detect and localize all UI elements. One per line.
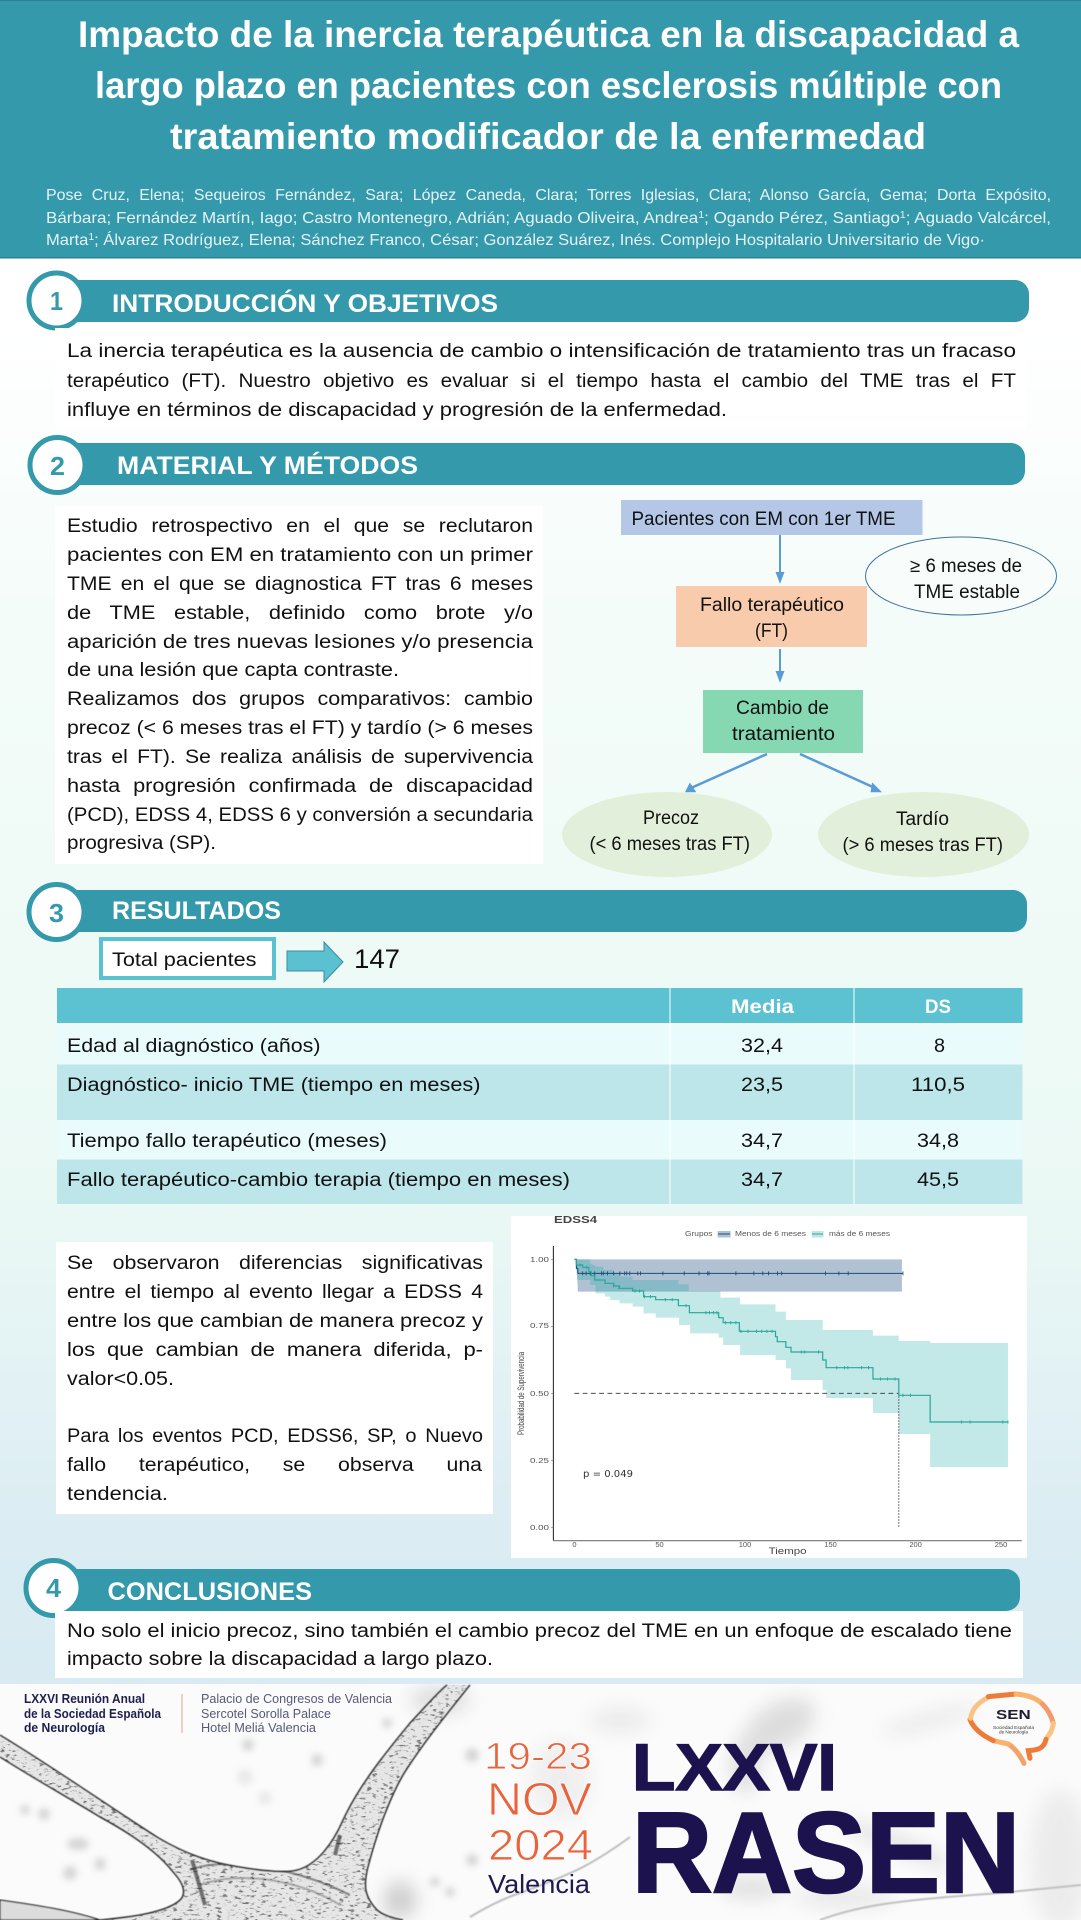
panel: results text: Para los eventos PCD, EDSS6, SP, o Nuevo <box>67 1426 483 1447</box>
authors <box>46 187 1051 249</box>
chart legend <box>685 1229 890 1238</box>
authors: 1 <box>698 210 705 221</box>
arrow: patients to failure <box>777 535 783 581</box>
panel: methods text: aparición de tres nuevas lesiones y/o presencia <box>67 632 533 653</box>
panel: results text: Se observaron diferencias significativas <box>67 1253 483 1274</box>
section 4 heading <box>26 1560 1020 1616</box>
total patients callout <box>101 939 400 982</box>
panel: results text <box>56 1242 493 1514</box>
chart legend: Grupos <box>685 1229 713 1238</box>
chart x axis labels: 100 <box>739 1540 751 1549</box>
section 3 heading <box>29 884 1027 940</box>
chart x axis labels: 0 <box>572 1540 576 1549</box>
chart legend: Menos de 6 meses <box>735 1229 806 1238</box>
panel: methods text: TME en el que se diagnostica FT tras 6 meses <box>67 574 533 595</box>
panel: methods text: precoz (< 6 meses tras el FT) y tardío (> 6 meses <box>67 718 533 739</box>
footer background and neuron image <box>0 1684 1081 1920</box>
footer: LXXVI RASEN wordmark <box>632 1730 1020 1917</box>
table rows: Fallo terapéutico-cambio terapia (tiempo en meses) <box>67 1170 570 1191</box>
chart x axis labels: 150 <box>824 1540 837 1549</box>
chart legend: más de 6 meses <box>829 1229 890 1238</box>
table rows: 110,5 <box>911 1075 965 1096</box>
authors: Marta <box>46 232 87 249</box>
panel: conclusions text <box>55 1611 1023 1678</box>
table header: Media <box>731 997 794 1018</box>
panel: results text: los que cambian de manera diferida, p- <box>67 1340 483 1361</box>
authors: Pose Cruz, Elena; Sequeiros Fernández, Sara; López Caneda, Clara; Torres Iglesias, Clara; Alonso García, Gema; Dorta Expósito, <box>46 187 1051 204</box>
panel: methods text: progresiva (SP). <box>67 833 216 854</box>
total patients callout: Total pacientes <box>112 950 256 971</box>
ellipse: stable TME: ≥ 6 meses de <box>910 556 1022 577</box>
footer: dates: 19-23 <box>484 1736 592 1778</box>
footer: dates: Valencia <box>488 1869 591 1899</box>
header banner <box>0 0 1081 258</box>
footer: SEN logo: Sociedad Española <box>993 1725 1035 1730</box>
title: tratamiento modificador de la enfermedad <box>170 116 926 157</box>
panel: results text: fallo terapéutico, se observa una <box>67 1455 482 1476</box>
chart y axis labels <box>516 1255 549 1532</box>
panel: methods text: de TME estable, definido como brote y/o <box>67 603 533 624</box>
table header: DS <box>925 997 951 1018</box>
panel: results text: valor<0.05. <box>67 1369 174 1390</box>
chart: survival curve EDSS4 <box>511 1215 1027 1558</box>
panel: methods text: de una lesión que capta contraste. <box>67 660 399 681</box>
box: treatment change <box>703 690 863 753</box>
panel: methods text: (PCD), EDSS 4, EDSS 6 y conversión a secundaria <box>67 805 533 826</box>
title: Impacto de la inercia terapéutica en la discapacidad a <box>78 14 1019 55</box>
authors: ; Ogando Pérez, Santiago <box>704 210 900 227</box>
ellipse: early: (< 6 meses tras FT) <box>590 834 750 855</box>
table rows: Edad al diagnóstico (años) <box>67 1036 320 1057</box>
title: largo plazo en pacientes con esclerosis múltiple con <box>95 65 1002 106</box>
ellipse: early: Precoz <box>643 808 699 829</box>
chart y axis labels: Probabilidad de Supervivencia <box>516 1352 526 1435</box>
panel: methods text: Realizamos dos grupos comparativos: cambio <box>67 689 533 710</box>
table rows: 23,5 <box>741 1075 783 1096</box>
section 1 heading <box>29 273 1029 328</box>
authors: Bárbara; Fernández Martín, Iago; Castro Montenegro, Adrián; Aguado Oliveira, Andrea <box>46 210 660 227</box>
p value: p = 0.049 <box>583 1469 633 1480</box>
panel: methods text: tras el FT). Se realiza análisis de supervivencia <box>67 747 533 768</box>
chart plot area <box>551 1246 1022 1541</box>
section 2 heading: 2 <box>50 451 65 481</box>
table rows: 34,7 <box>741 1170 783 1191</box>
authors: ; Álvarez Rodríguez, Elena; Sánchez Franco, César; González Suárez, Inés. Complejo Hospitalario Universitario de Vigo· <box>94 230 985 249</box>
table rows: 45,5 <box>917 1170 959 1191</box>
table rows: 8 <box>934 1036 945 1057</box>
box: treatment change: Cambio de <box>736 698 829 719</box>
table rows: Diagnóstico- inicio TME (tiempo en meses) <box>67 1075 481 1096</box>
section 1 heading: 1 <box>50 286 63 316</box>
chart y axis labels: 0.00 <box>530 1523 549 1532</box>
arrow: failure to change <box>777 649 783 680</box>
footer: SEN logo <box>970 1694 1053 1763</box>
total value: 147 <box>354 944 400 974</box>
panel: methods text: pacientes con EM en tratamiento con un primer <box>67 545 534 566</box>
panel: conclusions text: No solo el inicio precoz, sino también el cambio precoz del TME en un enfoque de escalado tiene <box>67 1621 1012 1642</box>
table rows: Tiempo fallo terapéutico (meses) <box>67 1131 387 1152</box>
footer: meeting name: de Neurología <box>24 1721 106 1735</box>
box: patients <box>621 500 922 535</box>
chart y axis labels: 0.75 <box>530 1321 549 1330</box>
chart title: EDSS4 <box>554 1215 598 1226</box>
authors: 1 <box>88 232 95 243</box>
footer: venues: Hotel Meliá Valencia <box>201 1721 316 1735</box>
ellipse: late <box>818 792 1029 877</box>
footer: SEN logo: SEN <box>996 1707 1031 1722</box>
panel: methods text: hasta progresión confirmada de discapacidad <box>67 776 533 797</box>
box: patients: Pacientes con EM con 1er TME <box>632 509 896 530</box>
box: treatment change: tratamiento <box>732 724 835 745</box>
ellipse: early <box>562 792 772 877</box>
chart x axis labels: Tiempo <box>769 1546 807 1556</box>
table rows: 32,4 <box>741 1036 783 1057</box>
footer: meeting name: de la Sociedad Española <box>24 1707 162 1721</box>
authors: ; Aguado Valcárcel, <box>906 210 1051 227</box>
arrow: to late <box>800 754 879 791</box>
box: therapeutic failure: Fallo terapéutico <box>700 595 844 616</box>
section 4 heading: 4 <box>46 1573 62 1603</box>
box: therapeutic failure <box>676 586 867 647</box>
footer: LXXVI RASEN wordmark: LXXVI <box>632 1730 837 1804</box>
footer: SEN logo: de Neurología <box>999 1730 1028 1734</box>
section 4 heading: CONCLUSIONES <box>108 1578 312 1606</box>
neuron <box>0 1684 1081 1920</box>
footer: LXXVI RASEN wordmark: RASEN <box>632 1790 1020 1917</box>
ellipse: stable TME <box>866 537 1056 615</box>
chart y axis labels: 0.50 <box>530 1389 549 1398</box>
footer: venues <box>201 1692 392 1735</box>
panel: methods text: Estudio retrospectivo en el que se reclutaron <box>67 516 533 537</box>
results table <box>57 988 1022 1204</box>
panel: methods text <box>55 506 543 864</box>
panel: introduction text: influye en términos de discapacidad y progresión de la enfermedad. <box>67 400 727 421</box>
panel: introduction text: La inercia terapéutica es la ausencia de cambio o intensificación de tratamiento tras un fracaso <box>67 341 1016 362</box>
flow diagram <box>562 500 1056 877</box>
chart x axis labels <box>572 1540 1007 1556</box>
section 2 heading <box>30 438 1025 492</box>
footer: dates: NOV <box>487 1773 592 1825</box>
chart x axis labels: 200 <box>909 1540 922 1549</box>
chart x axis labels: 50 <box>655 1540 664 1549</box>
chart y axis labels: 0.25 <box>530 1456 549 1465</box>
footer: venues: Palacio de Congresos de Valencia <box>201 1692 392 1706</box>
table header <box>731 997 951 1018</box>
footer: dates: 2024 <box>488 1821 593 1870</box>
panel: results text: entre el tiempo al evento llegar a EDSS 4 <box>67 1282 483 1303</box>
title <box>78 14 1019 157</box>
footer banner <box>0 1684 1081 1920</box>
box: therapeutic failure: (FT) <box>755 621 788 642</box>
ellipse: stable TME: TME estable <box>914 582 1020 603</box>
chart y axis labels: 1.00 <box>530 1255 549 1264</box>
footer: venues: Sercotel Sorolla Palace <box>201 1707 331 1721</box>
footer: meeting name <box>24 1692 162 1735</box>
authors: 1 <box>900 210 906 221</box>
section 1 heading: INTRODUCCIÓN Y OBJETIVOS <box>112 288 498 318</box>
arrow: total <box>287 942 343 982</box>
ellipse: late: (> 6 meses tras FT) <box>842 835 1003 856</box>
footer: dates <box>484 1736 593 1899</box>
panel: conclusions text: impacto sobre la discapacidad a largo plazo. <box>67 1649 493 1670</box>
section 3 heading: RESULTADOS <box>112 897 281 925</box>
chart x axis labels: 250 <box>995 1540 1007 1549</box>
table rows: 34,8 <box>917 1131 959 1152</box>
ellipse: late: Tardío <box>896 809 949 830</box>
table rows: 34,7 <box>741 1131 783 1152</box>
section 3 heading: 3 <box>49 898 64 928</box>
panel: introduction text <box>55 328 1026 428</box>
section 2 heading: MATERIAL Y MÉTODOS <box>117 451 418 480</box>
panel: results text: tendencia. <box>67 1484 168 1505</box>
panel: results text: entre los que cambian de manera precoz y <box>67 1311 484 1332</box>
table rows <box>67 1036 965 1191</box>
arrow: to early <box>687 754 767 791</box>
panel: introduction text: terapéutico (FT). Nuestro objetivo es evaluar si el tiempo hasta el cambio del TME tras el FT <box>67 371 1016 392</box>
footer: meeting name: LXXVI Reunión Anual <box>24 1692 145 1706</box>
